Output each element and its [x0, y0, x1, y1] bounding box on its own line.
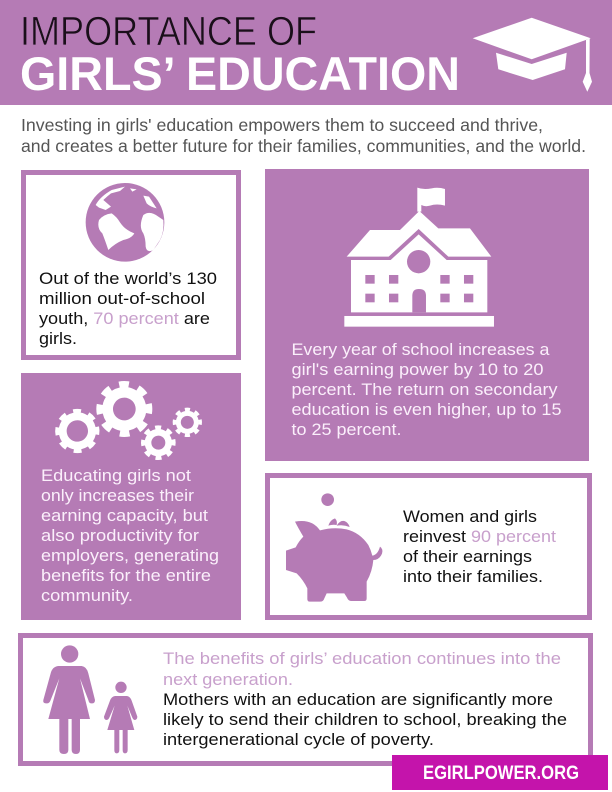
icon: globe	[86, 183, 164, 262]
panel text: education is even higher, up to 15	[292, 401, 562, 419]
icon: piggy bank	[286, 493, 382, 602]
panel: productivity	[21, 373, 241, 620]
panel text: community.	[41, 587, 133, 605]
panel text: employers, generating	[41, 547, 219, 565]
panel text: to 25 percent.	[292, 421, 402, 439]
intro text	[21, 115, 586, 156]
panel text	[403, 508, 556, 586]
intro text: Investing in girls' education empowers them to succeed and thrive,	[21, 115, 543, 135]
panel text: earning capacity, but	[41, 507, 208, 525]
panel text: reinvest 90 percent	[403, 528, 556, 546]
panel text: Every year of school increases a	[292, 341, 550, 359]
panel: out-of-school youth	[24, 172, 238, 358]
panel text: only increases their	[41, 487, 195, 505]
panel text: benefits for the entire	[41, 567, 211, 585]
panel text	[41, 467, 219, 605]
panel text: next generation.	[163, 671, 293, 689]
website banner: EGIRLPOWER.ORG	[423, 763, 579, 784]
icon: mother and daughter	[43, 645, 137, 754]
panel text	[39, 270, 217, 348]
panel text: Out of the world’s 130	[39, 270, 217, 288]
panel text	[163, 650, 567, 749]
panel text: likely to send their children to school, breaking the	[163, 711, 567, 729]
panel text: also productivity for	[41, 527, 200, 545]
panel: next generation	[20, 636, 590, 764]
panel text	[292, 341, 562, 439]
header banner	[0, 0, 612, 105]
icon: school building	[344, 188, 494, 327]
panel: earning power	[265, 169, 589, 461]
panel text: girls.	[39, 330, 77, 348]
panel text: into their families.	[403, 568, 543, 586]
icon: gears	[54, 380, 203, 461]
panel text: million out-of-school	[39, 290, 205, 308]
panel text: intergenerational cycle of poverty.	[163, 731, 434, 749]
panel text: girl's earning power by 10 to 20	[292, 361, 544, 379]
panel text: Mothers with an education are significantly more	[163, 691, 553, 709]
panel text: Women and girls	[403, 508, 537, 526]
panel text: The benefits of girls’ education continues into the	[163, 650, 561, 668]
title line two: GIRLS’ EDUCATION	[20, 47, 460, 100]
panel text: of their earnings	[403, 548, 532, 566]
intro text: and creates a better future for their families, communities, and the world.	[21, 136, 586, 156]
website banner	[392, 755, 608, 790]
icon: graduation cap	[473, 18, 592, 92]
title line one: IMPORTANCE OF	[20, 8, 317, 54]
panel: reinvest earnings	[268, 476, 590, 618]
panel text: youth, 70 percent are	[39, 310, 210, 328]
panel text: Educating girls not	[41, 467, 191, 485]
panel text: percent. The return on secondary	[292, 381, 558, 399]
